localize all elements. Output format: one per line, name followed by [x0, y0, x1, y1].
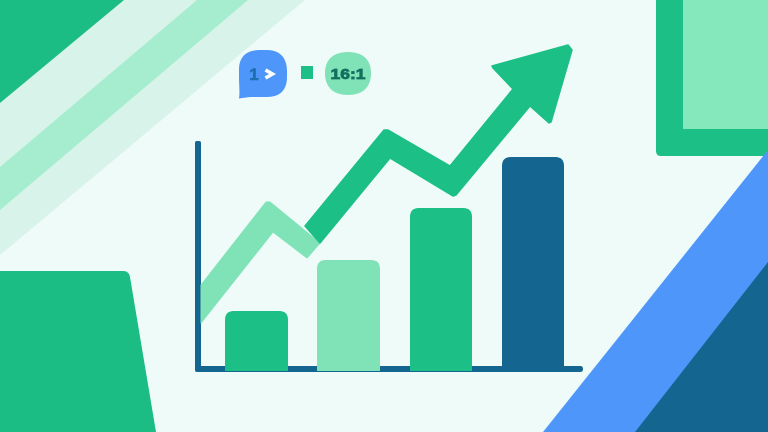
bar 2	[317, 260, 380, 371]
bottom-right diagonal bands	[543, 150, 768, 432]
x axis	[195, 366, 583, 372]
rising trend arrow	[201, 45, 572, 323]
top-left diagonal bands	[0, 0, 305, 255]
arrow dark segment	[305, 45, 572, 243]
badge row	[239, 50, 371, 98]
bar chart	[195, 141, 583, 372]
arrow light segment	[201, 202, 320, 323]
top-right square panel	[656, 0, 768, 156]
ratio badge: 16:1	[330, 66, 366, 83]
speech bubble badge: 1	[249, 65, 259, 84]
y axis	[195, 141, 201, 372]
bottom-left panel	[0, 271, 156, 432]
bar 1	[225, 311, 288, 371]
small square	[301, 66, 313, 79]
bar 3	[410, 208, 472, 371]
bar 4	[502, 157, 564, 371]
